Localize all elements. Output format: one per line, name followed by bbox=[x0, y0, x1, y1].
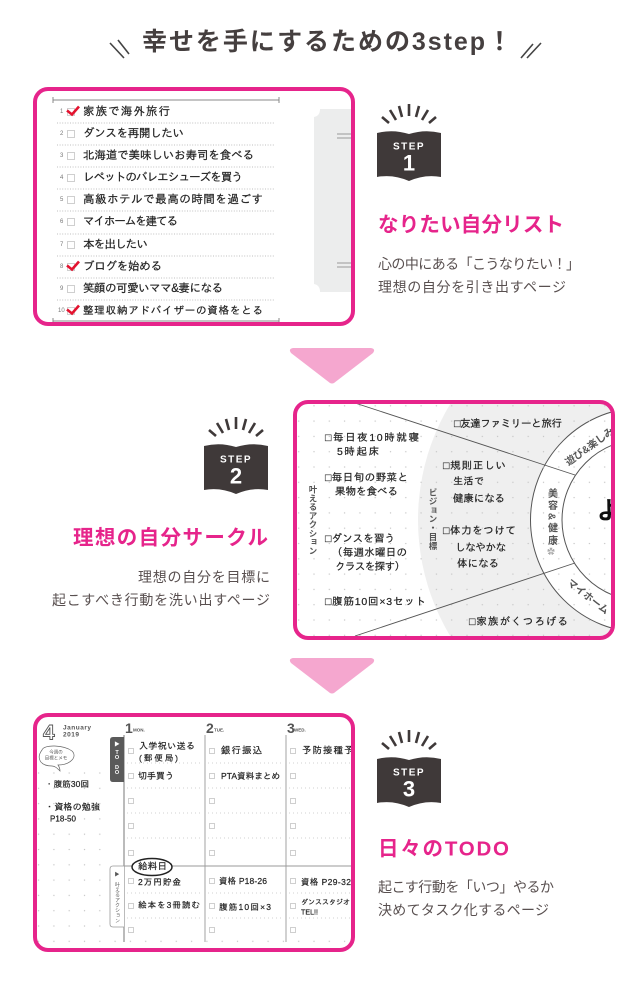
date block bbox=[42, 724, 91, 740]
step 2 badge: 2 bbox=[230, 464, 242, 488]
red check marks bbox=[67, 106, 79, 314]
arrow: step 1 to 2 bbox=[290, 348, 374, 384]
list text: 高級ホテルで最高の時間を過ごす bbox=[83, 193, 263, 206]
payday circled note: 給料日 bbox=[138, 860, 167, 872]
step 1 description: 心の中にある「こうなりたい！」 bbox=[378, 256, 580, 272]
step 2 description: 理想の自分を目標に bbox=[138, 569, 270, 585]
action tag: ▶ bbox=[114, 872, 120, 878]
list text: レペットのバレエシューズを買う bbox=[83, 171, 243, 184]
step 1 description: 理想の自分を引き出すページ bbox=[378, 279, 566, 295]
action items: □毎日夜10時就寝 bbox=[325, 432, 419, 444]
todo tag bbox=[110, 737, 124, 782]
vertical labels: 遊び&楽しみ bbox=[563, 424, 617, 468]
step 3 description: 起こす行動を「いつ」やるか bbox=[378, 879, 554, 895]
column headers: 2 bbox=[206, 720, 214, 736]
list text: 整理収納アドバイザーの資格をとる bbox=[83, 304, 263, 317]
action items: □ダンスを習う bbox=[325, 533, 395, 545]
column headers: 1 bbox=[125, 720, 133, 736]
todo entries bbox=[138, 741, 364, 916]
title: 幸せを手にするための3step！ bbox=[142, 28, 512, 56]
panel: wish list: 7 bbox=[60, 242, 64, 248]
todo tag: ▶ bbox=[114, 741, 120, 748]
todo entries: 資格 P18-26 bbox=[219, 876, 267, 886]
step 2 description bbox=[52, 569, 270, 608]
date block: January bbox=[63, 724, 91, 732]
todo tag: T bbox=[115, 750, 119, 756]
action tag bbox=[110, 866, 124, 927]
memo bubble: 目標とメモ bbox=[45, 754, 68, 762]
payday circled note bbox=[132, 858, 172, 876]
action items: □腹筋10回×3セット bbox=[325, 596, 426, 608]
column headers bbox=[126, 724, 306, 733]
weekly memo text: P18-50 bbox=[50, 814, 77, 824]
panel: wish list: 8 bbox=[60, 264, 64, 270]
step 1 description bbox=[378, 256, 580, 295]
weekly memo text bbox=[45, 779, 100, 824]
panel: wish list: 3 bbox=[60, 153, 64, 159]
weekly memo text: ・腹筋30回 bbox=[45, 779, 89, 789]
panel: wish list: 2 bbox=[60, 131, 64, 137]
vertical labels: 叶えるアクション bbox=[308, 485, 318, 555]
todo entries: 予防接種予約 bbox=[302, 746, 364, 756]
todo tag: O bbox=[115, 770, 120, 776]
action items: （毎週水曜日の bbox=[332, 547, 407, 559]
todo entries: 2万円貯金 bbox=[138, 877, 182, 887]
list text: ブログを始める bbox=[83, 260, 162, 273]
vision items bbox=[443, 417, 568, 628]
list text: ダンスを再開したい bbox=[83, 127, 184, 140]
checkboxes bbox=[128, 748, 296, 932]
step 1 heading: なりたい自分リスト bbox=[378, 214, 564, 236]
step 3 badge bbox=[377, 730, 441, 807]
date block: 4 bbox=[43, 722, 55, 744]
column headers: TUE. bbox=[214, 728, 224, 732]
vertical labels: マイホーム bbox=[565, 577, 611, 617]
vision items: □家族がくつろげる bbox=[469, 615, 568, 628]
todo tag: O bbox=[115, 755, 120, 761]
vertical labels: ✿ bbox=[547, 548, 555, 556]
step 3 badge: 3 bbox=[403, 776, 415, 802]
panel: wish list: 4 bbox=[60, 175, 64, 181]
action items: 5時起床 bbox=[337, 446, 379, 458]
step 1 badge: STEP bbox=[393, 142, 425, 152]
step 3 description bbox=[378, 879, 554, 918]
todo entries: ダンススタジオ bbox=[301, 898, 350, 906]
list text: 北海道で美味しいお寿司を食べる bbox=[83, 148, 254, 162]
action items: クラスを探す） bbox=[335, 561, 405, 573]
todo tag: D bbox=[115, 765, 119, 771]
vision items: □規則正しい bbox=[443, 460, 506, 472]
list text: 笑顔の可愛いママ&妻になる bbox=[83, 282, 223, 295]
todo entries: 腹筋10回×3 bbox=[219, 902, 271, 912]
weekly memo text: ・資格の勉強 bbox=[45, 802, 100, 812]
action items bbox=[325, 432, 426, 608]
step 3 description: 決めてタスク化するページ bbox=[378, 902, 549, 918]
todo entries: 銀行振込 bbox=[221, 746, 262, 756]
column headers: 3 bbox=[287, 720, 295, 736]
column headers: MON. bbox=[133, 728, 145, 732]
list text: 家族で海外旅行 bbox=[83, 104, 170, 118]
panel: wish list: 10 bbox=[58, 308, 65, 314]
panel: wish list: 5 bbox=[60, 197, 64, 203]
list text: 本を出したい bbox=[83, 238, 148, 251]
action items: □毎日旬の野菜と bbox=[325, 472, 408, 484]
todo entries: TEL!! bbox=[301, 910, 318, 916]
todo entries: 絵本を3冊読む bbox=[138, 900, 200, 910]
action items: 果物を食べる bbox=[335, 486, 398, 498]
memo bubble: 今週の bbox=[49, 748, 63, 756]
todo entries: 入学祝い送る bbox=[139, 741, 195, 751]
vision items: □体力をつけて bbox=[443, 524, 516, 537]
panel: wish list: 1 bbox=[60, 109, 64, 115]
step 2 description: 起こすべき行動を洗い出すページ bbox=[52, 592, 270, 608]
step 1 badge bbox=[377, 104, 441, 181]
step 1 badge: 1 bbox=[403, 150, 415, 176]
list text bbox=[83, 104, 263, 317]
todo entries: 資格 P29-32 bbox=[301, 877, 351, 887]
column headers: WED. bbox=[294, 728, 306, 732]
vision items: 生活で bbox=[453, 476, 484, 488]
vision items: しなやかな bbox=[455, 542, 506, 554]
step 3 heading: 日々のTODO bbox=[378, 838, 509, 860]
vision items: □友達ファミリーと旅行 bbox=[454, 417, 562, 430]
step 2 badge bbox=[204, 417, 268, 494]
vision items: 健康になる bbox=[453, 493, 505, 505]
vision items: 体になる bbox=[457, 557, 499, 570]
step 3 badge: STEP bbox=[393, 768, 425, 778]
todo entries: PTA資料まとめ bbox=[221, 771, 280, 781]
panel: wish list bbox=[35, 89, 354, 324]
todo entries: 切手買う bbox=[138, 771, 174, 781]
list text: マイホームを建てる bbox=[83, 215, 178, 228]
date block: 2019 bbox=[63, 732, 79, 738]
action tag: 叶えるアクション bbox=[114, 881, 120, 923]
vertical labels bbox=[308, 424, 617, 617]
panel: daily todo bbox=[35, 715, 364, 950]
arrow: step 2 to 3 bbox=[290, 658, 374, 694]
hand-drawn center word: よ bbox=[597, 498, 621, 524]
vertical labels: ビジョン・目標 bbox=[428, 487, 438, 551]
panel: ideal self circle bbox=[293, 400, 615, 640]
todo entries: (郵便局) bbox=[139, 753, 178, 763]
step 2 heading: 理想の自分サークル bbox=[73, 526, 268, 550]
panel: wish list: 9 bbox=[60, 286, 64, 292]
panel: wish list: 6 bbox=[60, 219, 64, 225]
step 2 badge: STEP bbox=[220, 454, 252, 466]
vertical labels: 美容&健康 bbox=[546, 487, 558, 546]
memo bubble bbox=[39, 746, 74, 771]
